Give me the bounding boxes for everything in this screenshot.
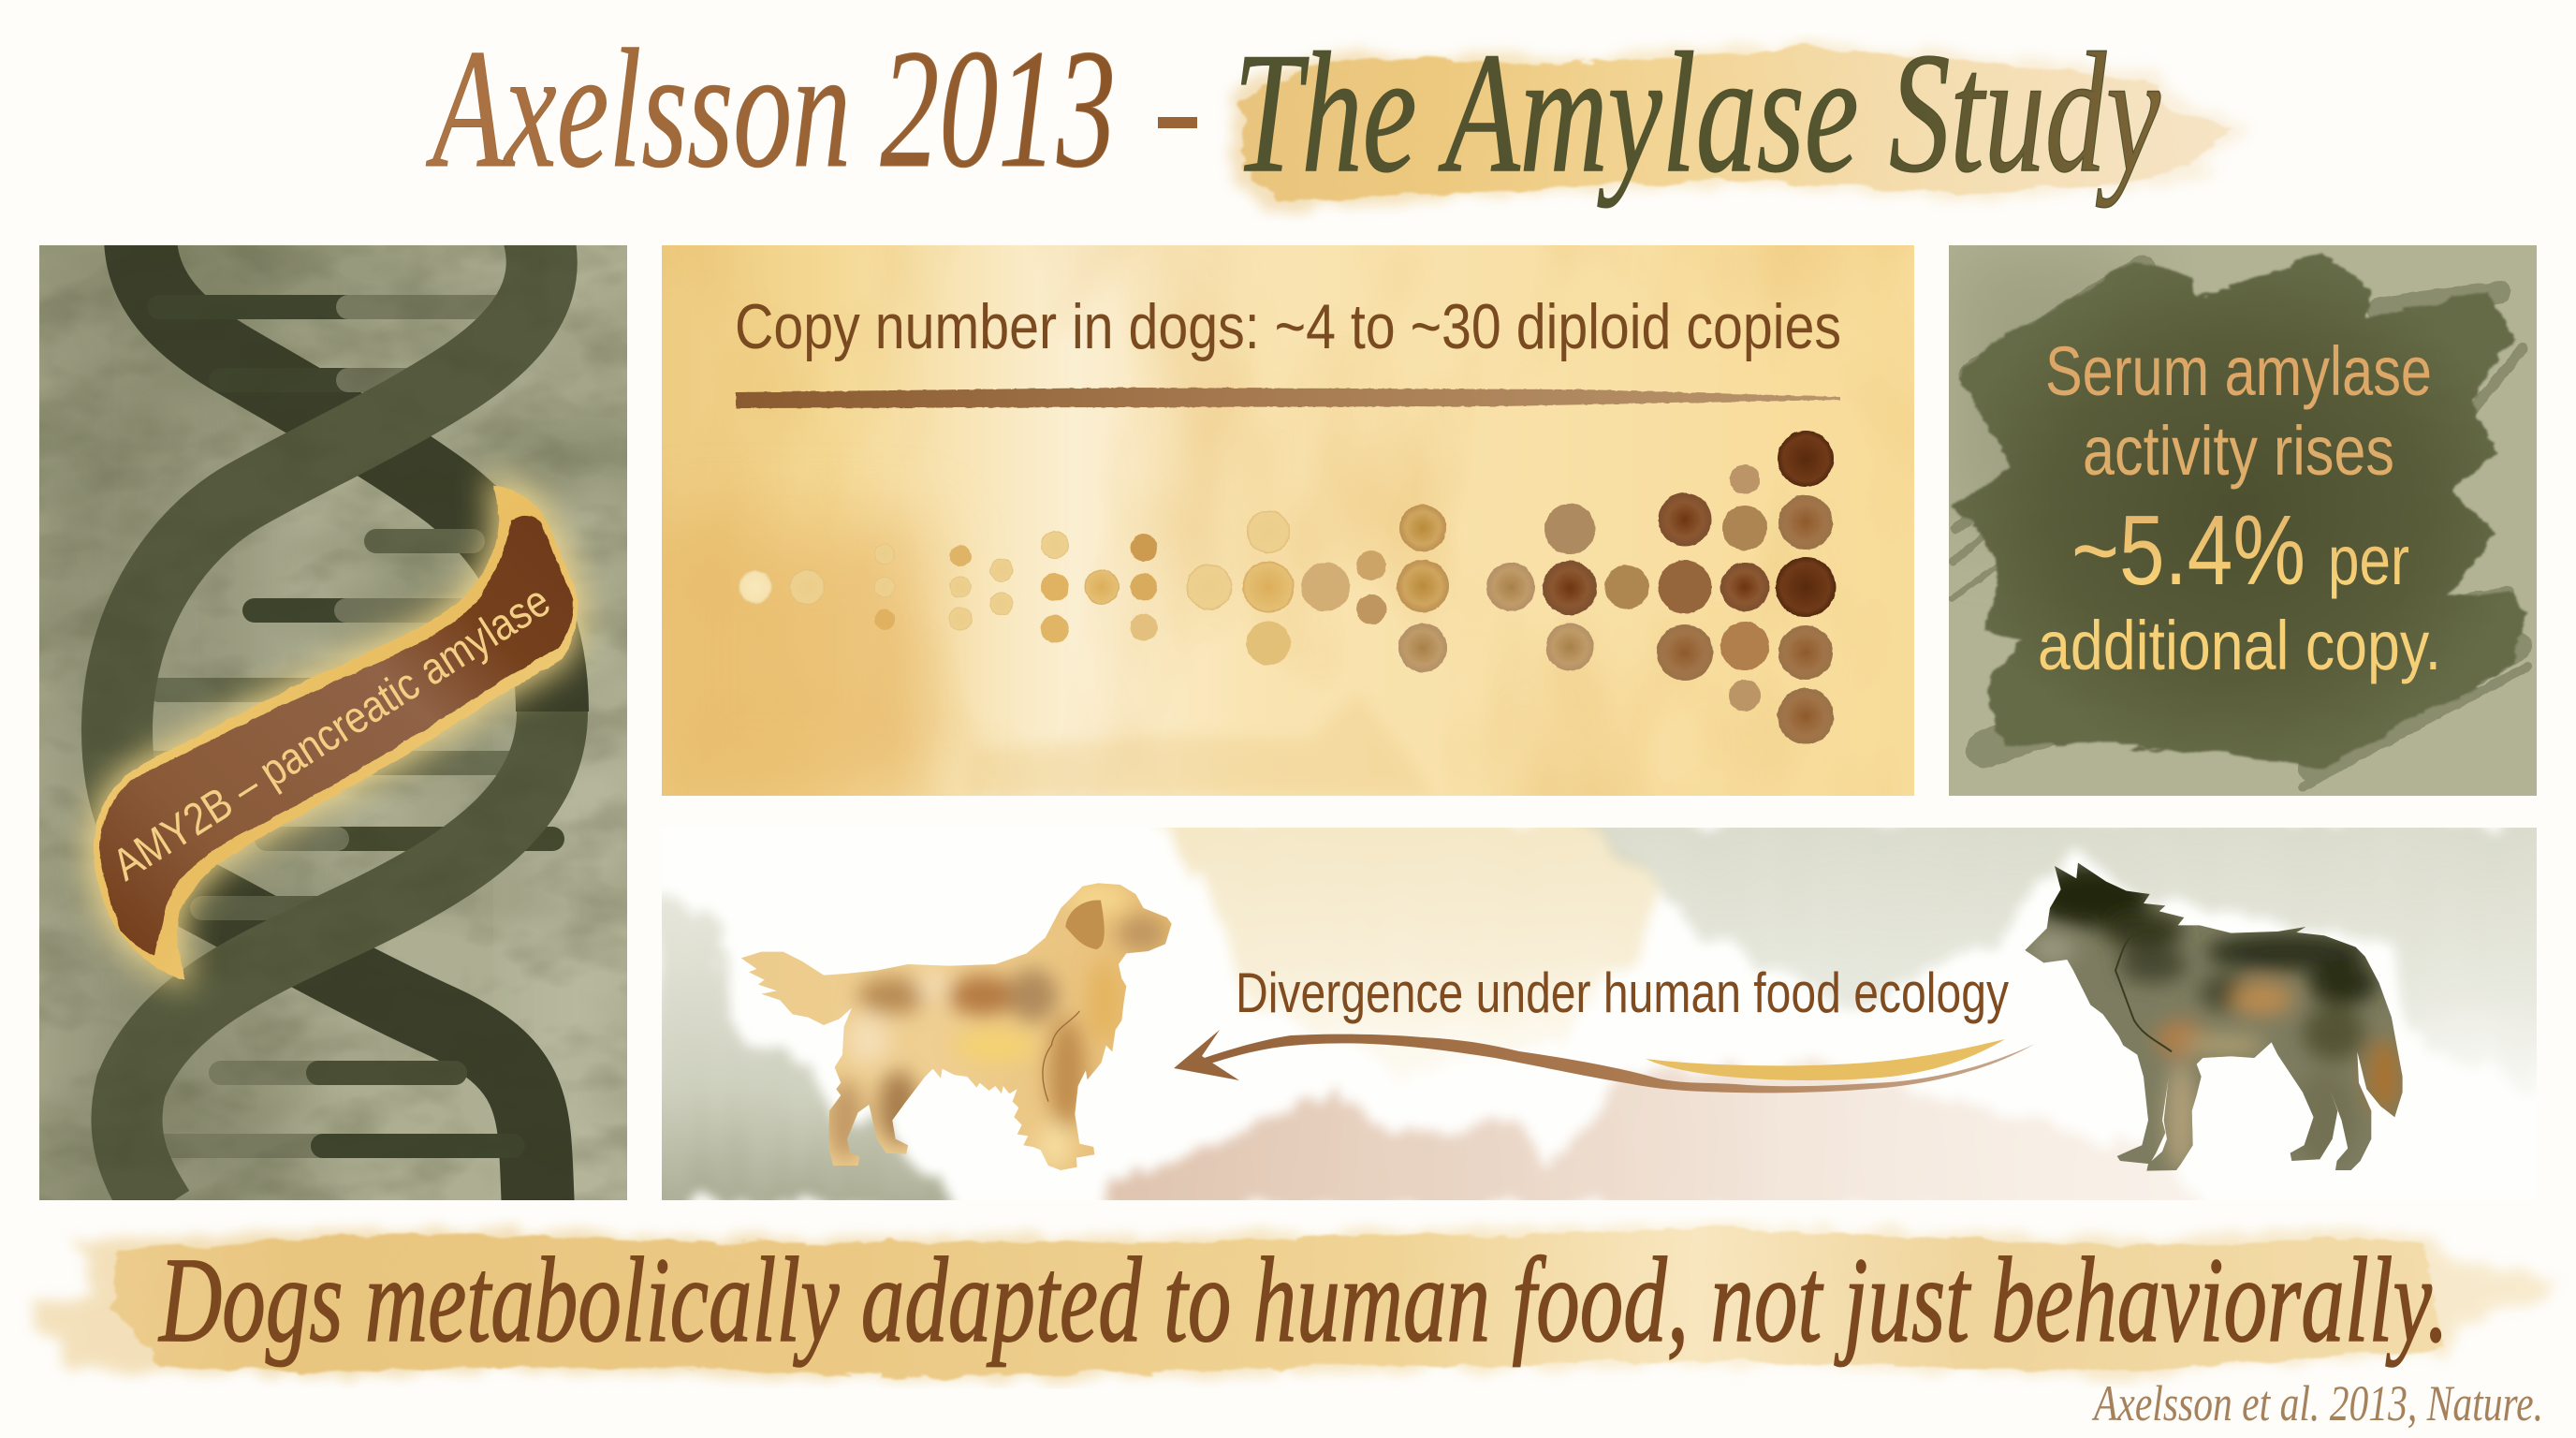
serum text: per	[2328, 521, 2409, 599]
brush underline	[736, 388, 1840, 408]
ribbon glow	[94, 485, 578, 979]
serum text: Serum amylase	[2045, 332, 2432, 410]
title	[426, 15, 2160, 208]
icon: wolf	[2025, 863, 2403, 1173]
divergence arrow	[1174, 1030, 2035, 1093]
panel: DNA helix with AMY2B ribbon	[39, 236, 627, 1210]
DNA rungs	[131, 307, 552, 1146]
divergence caption: Divergence under human food ecology	[1236, 961, 2009, 1024]
serum text: ~5.4%	[2071, 495, 2305, 606]
watercolor washes	[646, 814, 2555, 1212]
gold accent stroke	[1646, 1039, 2005, 1080]
serum text: activity rises	[2083, 412, 2394, 490]
panel: copy-number gel	[646, 245, 1914, 805]
ribbon label: AMY2B – pancreatic amylase	[104, 576, 559, 890]
serum text	[2038, 332, 2441, 684]
panel: serum amylase	[1949, 245, 2537, 796]
title: green part: The Amylase Study	[1234, 17, 2160, 208]
panel: divergence dog and wolf	[646, 814, 2555, 1212]
icon: golden retriever	[741, 883, 1172, 1170]
title: dash	[1158, 117, 1197, 128]
gel heading: Copy number in dogs: ~4 to ~30 diploid copies	[735, 291, 1841, 362]
DNA dark strand segments	[140, 236, 552, 1210]
gene ribbon	[94, 485, 578, 979]
conclusion banner wash	[33, 1224, 2563, 1381]
title: brown part: Axelsson 2013	[426, 15, 1116, 203]
dark brush wash	[1951, 254, 2525, 766]
brush streaks	[1952, 267, 2527, 786]
copy number dots	[739, 431, 1836, 744]
DNA lighter strand segments	[117, 236, 552, 1210]
dog ear	[1065, 901, 1105, 949]
title banner wash	[1232, 42, 2250, 213]
serum text: additional copy.	[2038, 607, 2441, 684]
